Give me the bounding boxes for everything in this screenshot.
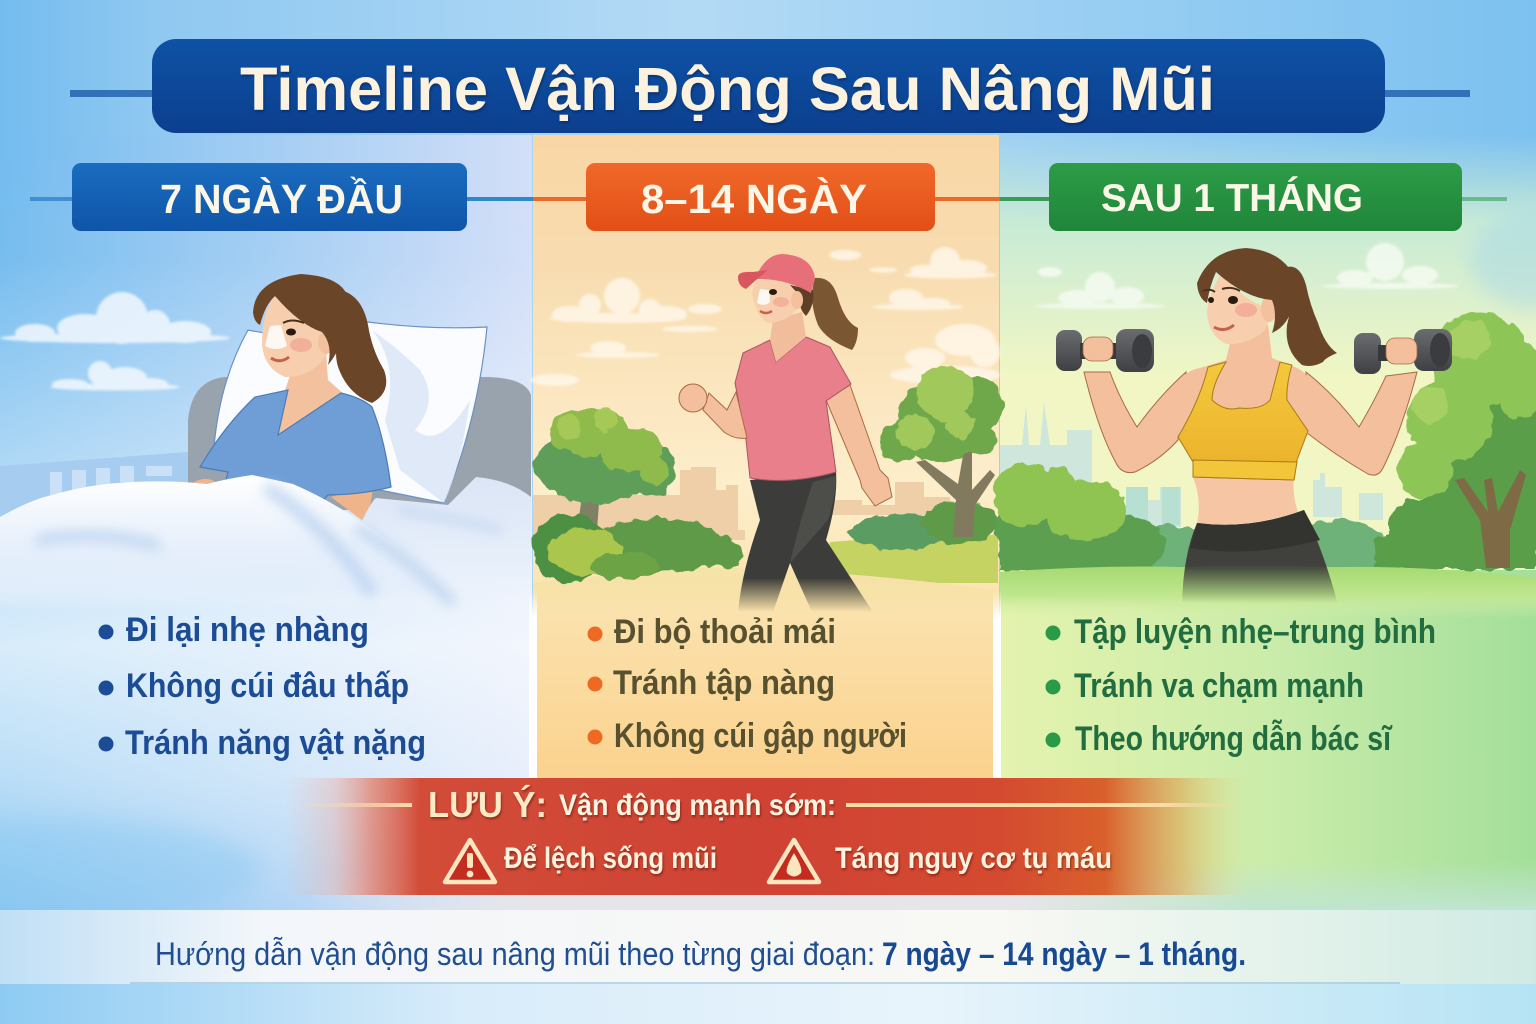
gown bbox=[200, 390, 391, 525]
fist bbox=[679, 384, 707, 412]
list: 8-14 ngày: Tránh tập nàng bbox=[613, 664, 835, 702]
far arm bbox=[703, 392, 747, 438]
list: sau 1 tháng: Theo hướng dẫn bác sĩ bbox=[1075, 720, 1393, 758]
right canopy bbox=[880, 364, 1003, 462]
footer caption: 7 ngày – 14 ngày – 1 tháng. bbox=[882, 936, 1246, 972]
left canopy bbox=[533, 408, 676, 503]
facial features bbox=[271, 320, 312, 361]
illustration: walking in the park bbox=[531, 247, 1003, 616]
right tree trunk bbox=[1455, 470, 1526, 568]
panel: sau 1 tháng bbox=[1000, 135, 1536, 910]
skyline bbox=[533, 467, 950, 540]
panel separators bbox=[300, 590, 1250, 910]
list: 7 ngày đầu bbox=[98, 611, 426, 762]
dumbbell left bbox=[1056, 329, 1154, 372]
heading: 7 ngày đầu: 7 NGÀY ĐẦU bbox=[160, 176, 403, 222]
warning subheading: Vận động mạnh sớm: bbox=[559, 789, 836, 822]
back hedge bbox=[1100, 520, 1390, 576]
list: 7 ngày đầu: Đi lại nhẹ nhàng bbox=[126, 611, 369, 649]
path bbox=[533, 568, 998, 616]
warning band bbox=[285, 778, 1250, 895]
blanket folds bbox=[40, 490, 500, 600]
face bbox=[262, 296, 330, 377]
dumbbell right bbox=[1354, 329, 1452, 374]
skyline bbox=[1000, 403, 1383, 527]
waistband bbox=[1190, 510, 1320, 552]
near arm bbox=[826, 385, 892, 506]
facial features bbox=[760, 289, 789, 313]
blanket bbox=[0, 475, 460, 610]
neck bbox=[770, 312, 806, 362]
clouds bbox=[531, 247, 1000, 386]
shorts bbox=[1182, 510, 1338, 605]
top band bbox=[1193, 460, 1297, 480]
panel: 7 ngày đầu bbox=[0, 135, 532, 920]
ear bbox=[318, 330, 334, 354]
list: 7 ngày đầu: Tránh năng vật nặng bbox=[125, 724, 426, 762]
icon: blood drop warning bbox=[769, 840, 819, 882]
ponytail bbox=[1287, 267, 1337, 366]
face bbox=[752, 272, 812, 323]
back hedges bbox=[590, 500, 998, 572]
list: 8-14 ngày: Đi bộ thoải mái bbox=[614, 613, 836, 651]
list: 8-14 ngày: Không cúi gập người bbox=[614, 717, 907, 755]
facial features bbox=[1203, 288, 1257, 330]
list: 7 ngày đầu: Không cúi đâu thấp bbox=[126, 667, 409, 705]
nose bandage bbox=[757, 289, 770, 305]
clouds bbox=[1036, 243, 1458, 309]
arm bbox=[331, 483, 374, 524]
ground bbox=[1000, 567, 1536, 618]
ear bbox=[791, 291, 803, 309]
footer caption: Hướng dẫn vận động sau nâng mũi theo từng giai đoạn: bbox=[155, 936, 875, 972]
illustration: resting in bed bbox=[0, 274, 531, 610]
title: Timeline Vận Động Sau Nâng Mũi bbox=[240, 55, 1215, 123]
list: sau 1 tháng bbox=[1046, 613, 1436, 758]
teal buildings bbox=[1126, 487, 1180, 525]
hair bbox=[1197, 248, 1294, 333]
right arm bbox=[1306, 372, 1417, 475]
heading: sau 1 tháng bbox=[1049, 163, 1462, 231]
sheet bbox=[300, 477, 531, 610]
pants bbox=[738, 472, 873, 612]
shirt bbox=[735, 337, 851, 480]
right tree back foliage bbox=[1375, 312, 1536, 570]
left tree trunk bbox=[560, 450, 620, 530]
midriff bbox=[1193, 477, 1298, 525]
hair under cap bbox=[790, 285, 813, 316]
hands bbox=[1083, 337, 1417, 364]
heading: sau 1 tháng: SAU 1 THÁNG bbox=[1101, 176, 1363, 220]
window rail bbox=[0, 452, 188, 517]
hair bbox=[253, 274, 348, 365]
heading: 7 ngày đầu bbox=[72, 163, 467, 231]
list: sau 1 tháng: Tập luyện nhẹ–trung bình bbox=[1074, 613, 1436, 651]
title banner bbox=[152, 39, 1385, 133]
sports top bbox=[1178, 362, 1308, 480]
warning item: lệch sống mũi: Để lệch sống mũi bbox=[504, 842, 717, 875]
cap bbox=[755, 254, 815, 293]
heading: 8-14 ngày bbox=[586, 163, 935, 231]
clouds bbox=[0, 292, 230, 390]
warning heading: LƯU Ý: bbox=[428, 784, 547, 825]
icon: warning triangle bbox=[445, 840, 495, 882]
warning item: nguy cơ tụ máu: Táng nguy cơ tụ máu bbox=[835, 842, 1112, 875]
left bush bbox=[532, 514, 659, 582]
ponytail bbox=[812, 278, 858, 350]
illustration: dumbbell workout bbox=[993, 243, 1536, 618]
left bushes bbox=[993, 463, 1165, 575]
neck bbox=[278, 352, 345, 437]
heading: 8-14 ngày: 8–14 NGÀY bbox=[641, 176, 867, 222]
right tree trunk bbox=[916, 450, 995, 537]
ear bbox=[1261, 296, 1277, 322]
list: 8-14 ngày bbox=[588, 613, 907, 755]
face bbox=[1207, 272, 1273, 344]
ponytail bbox=[336, 290, 386, 403]
panel: 8-14 ngày bbox=[533, 135, 999, 778]
bottom sky bbox=[0, 984, 1536, 1024]
list: sau 1 tháng: Tránh va chạm mạnh bbox=[1074, 667, 1364, 705]
nose bandage bbox=[265, 325, 287, 349]
headboard bbox=[188, 377, 531, 510]
pant highlight bbox=[790, 476, 836, 563]
cap brim bbox=[738, 270, 768, 289]
left arm bbox=[1084, 372, 1186, 473]
pillow bbox=[214, 322, 487, 503]
far lawn bbox=[820, 535, 998, 583]
footer strip bbox=[0, 910, 1536, 984]
panel connector lines bbox=[30, 90, 1507, 201]
neck and chest bbox=[1176, 325, 1312, 435]
hand bbox=[191, 479, 219, 497]
